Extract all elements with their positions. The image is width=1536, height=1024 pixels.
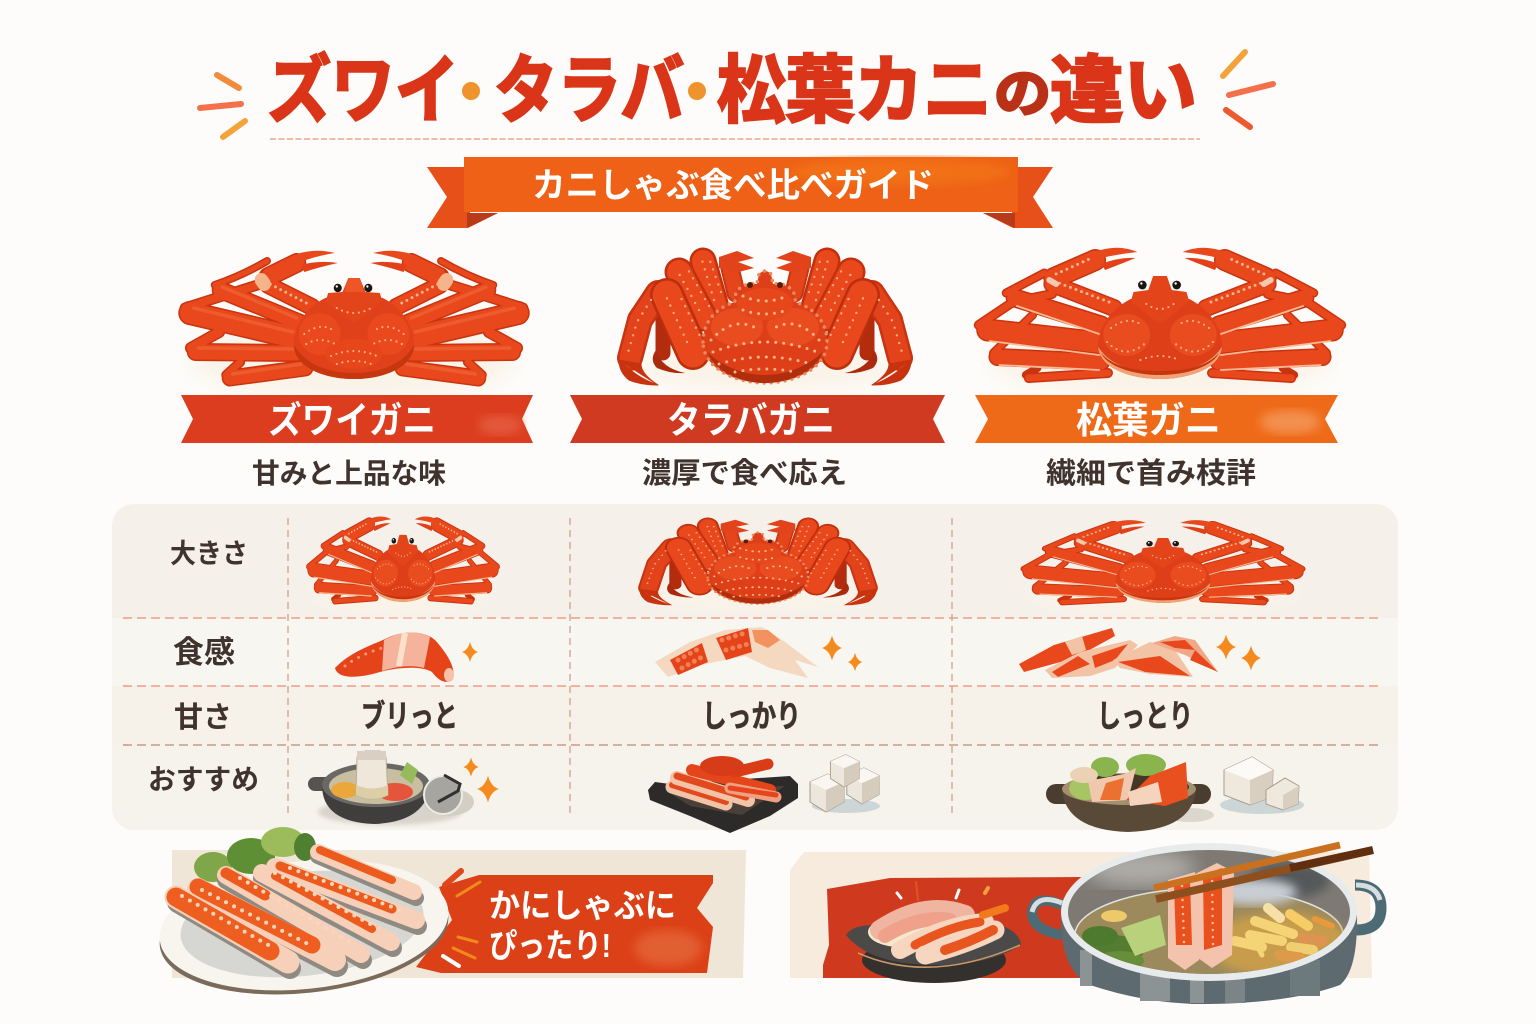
name ribbon: タラバガニ: タラバガニ — [667, 400, 835, 441]
texture: しっかり crab leg — [655, 627, 818, 678]
icon: sparkles — [822, 636, 862, 671]
banner background — [790, 852, 1372, 978]
yellow sticks — [1235, 908, 1332, 958]
texture: ブリっと crab leg — [335, 632, 454, 682]
icon: tofu cubes — [810, 755, 880, 813]
icon: sparkle — [462, 642, 478, 662]
panel: plate with crab legs — [153, 827, 746, 1008]
row label: 食感: 食感 — [173, 635, 235, 670]
name ribbon: ズワイガニ — [181, 395, 533, 443]
crab: 松葉ガニ — [979, 248, 1341, 398]
crab: ズワイガニ — [185, 251, 523, 400]
icon: title rays left — [200, 75, 245, 137]
lettuce — [194, 827, 316, 882]
value: ブリっと: ブリっと — [361, 699, 458, 734]
texture: しっとり crab pieces — [1019, 628, 1218, 678]
callout rays — [443, 871, 480, 966]
title: 違い — [1050, 49, 1197, 132]
name ribbon: 松葉ガニ: 松葉ガニ — [1076, 400, 1221, 441]
tagline: タラバガニ: 濃厚で食べ応え — [642, 457, 847, 490]
name ribbon: タラバガニ — [570, 395, 945, 443]
pot body — [1061, 915, 1357, 1004]
icon: clay pot with crab — [1046, 754, 1214, 832]
icon: grill with crab legs — [648, 756, 798, 833]
vegetables — [1080, 910, 1166, 971]
red banner — [823, 877, 1090, 978]
title dot — [462, 82, 480, 100]
icon: hot pot with bottle — [308, 751, 474, 825]
panel: comparison table — [112, 504, 1398, 833]
crab legs — [176, 850, 418, 968]
row label: 大きさ: 大きさ — [170, 539, 248, 569]
panel: plate with crab legs: ぴったり! — [489, 927, 611, 964]
pot handles — [1032, 885, 1381, 935]
pot rim and interior — [1061, 843, 1357, 981]
title — [267, 49, 1197, 132]
banner background — [172, 850, 746, 978]
value: しっかり: しっかり — [702, 699, 801, 734]
small plate with crab — [846, 910, 1021, 983]
title dot 2 — [688, 82, 706, 100]
size crab: 松葉ガニ — [1024, 520, 1302, 615]
tagline: ズワイガニ: 甘みと上品な味 — [252, 458, 446, 489]
subtitle ribbon — [427, 157, 1053, 228]
size crab: ズワイガニ — [309, 517, 497, 614]
name ribbon: ズワイガニ: ズワイガニ — [268, 400, 436, 441]
row label: おすすめ: おすすめ — [148, 764, 259, 795]
plate — [153, 854, 455, 1008]
row label: 甘さ: 甘さ — [174, 701, 232, 734]
panel: hot pot with chopsticks — [790, 843, 1381, 1004]
icon: title rays right — [1223, 52, 1273, 127]
title: ズワイ — [267, 49, 459, 132]
name ribbon: 松葉ガニ — [975, 395, 1338, 443]
icon: sparkles — [1216, 634, 1261, 670]
callout text: かにしゃぶに — [489, 887, 676, 924]
icon: sparkles — [463, 758, 499, 802]
subtitle ribbon: カニしゃぶ食べ比べガイド — [532, 167, 934, 205]
title: タラバ — [494, 49, 684, 132]
size crab: タラバガニ — [640, 520, 876, 609]
title: の — [994, 66, 1051, 124]
chopsticks — [1154, 845, 1373, 899]
tagline: 松葉ガニ: 繊細で首み枝詳 — [1046, 457, 1256, 490]
value: しっとり: しっとり — [1097, 699, 1193, 734]
crab: タラバガニ — [619, 251, 911, 392]
callout banner — [416, 875, 713, 973]
sparks — [897, 882, 1005, 915]
title: 松葉カニ — [717, 49, 992, 132]
icon: tofu cubes — [1220, 757, 1304, 814]
crab legs held by chopsticks — [1168, 863, 1234, 970]
